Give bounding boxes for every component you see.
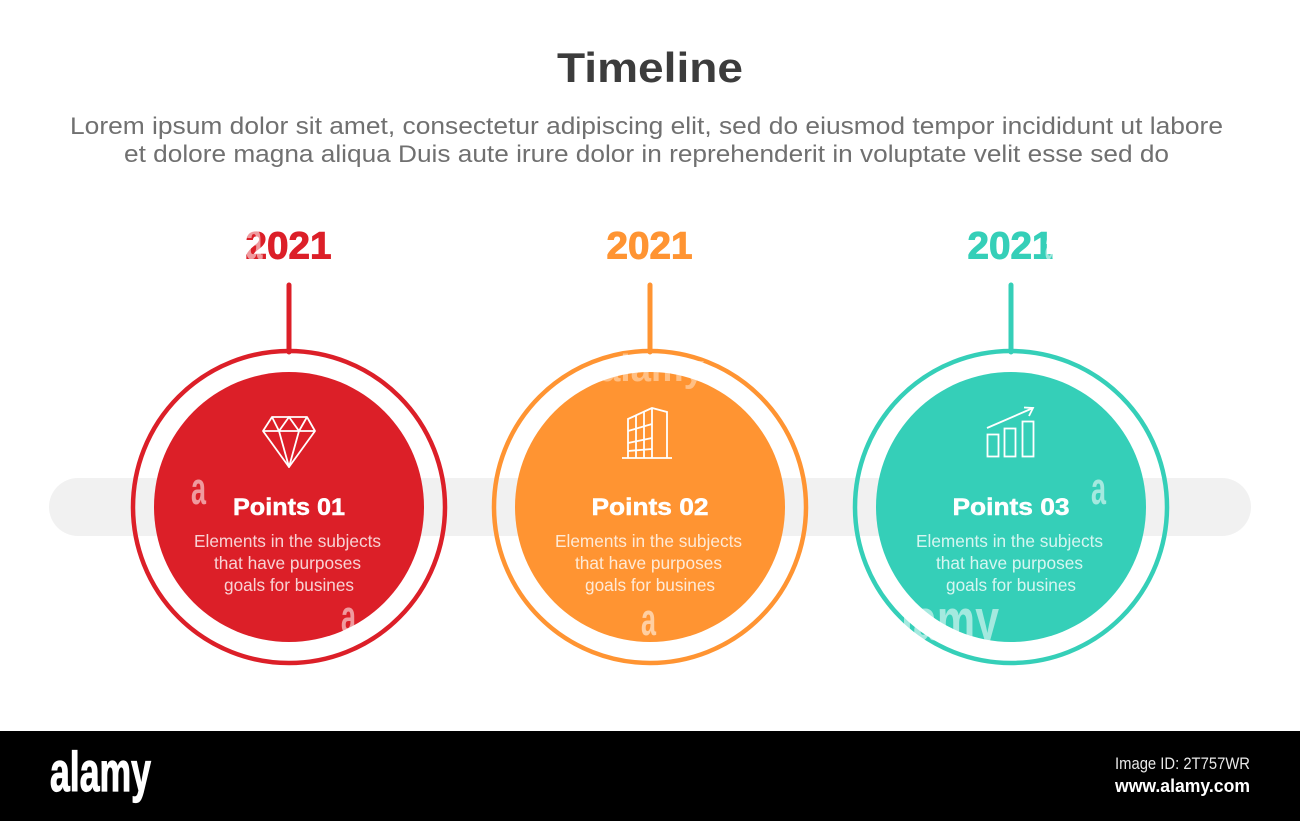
watermark overlays: lamy	[901, 588, 999, 653]
connector 02	[648, 285, 652, 352]
watermark overlays: a	[1091, 463, 1107, 514]
panel: point 01	[133, 226, 445, 663]
heading 02: Points 02	[592, 494, 708, 521]
year 02: 2021	[606, 226, 692, 268]
inner disc 02	[515, 372, 785, 642]
title: Timeline	[557, 44, 743, 91]
icon: growth chart	[987, 408, 1034, 456]
watermark overlays: a	[1045, 224, 1055, 268]
watermark overlays: a	[246, 208, 263, 271]
outer ring 02	[494, 351, 806, 663]
inner disc 03	[876, 372, 1146, 642]
footer website: www.alamy.com	[1114, 776, 1250, 796]
description 03: that have purposes	[936, 553, 1083, 573]
watermark overlays: alamy	[600, 348, 704, 390]
footer bar	[0, 731, 1300, 821]
subtitle text block: et dolore magna aliqua Duis aute irure dolor in reprehenderit in voluptate velit esse sed do	[124, 141, 1169, 168]
watermark overlays: a	[341, 591, 357, 642]
heading 03: Points 03	[952, 494, 1070, 521]
panel: point 02	[494, 226, 806, 663]
description 02	[555, 531, 742, 595]
description 01	[194, 531, 381, 595]
subtitle text block	[70, 113, 1223, 168]
inner disc 01	[154, 372, 424, 642]
footer image id: Image ID: 2T757WR	[1115, 754, 1250, 773]
watermark overlays	[191, 208, 1107, 653]
connector 01	[286, 285, 292, 352]
description 01: that have purposes	[214, 553, 361, 573]
description 03: goals for busines	[946, 575, 1076, 595]
year 01: 2021	[246, 226, 332, 268]
footer logo: alamy	[50, 740, 151, 803]
outer ring 01	[133, 351, 445, 663]
heading 01: Points 01	[233, 494, 345, 521]
description 02: goals for busines	[585, 575, 715, 595]
subtitle text block: Lorem ipsum dolor sit amet, consectetur adipiscing elit, sed do eiusmod tempor incididunt ut labore	[70, 113, 1223, 140]
description 03: Elements in the subjects	[916, 531, 1103, 551]
description 02: Elements in the subjects	[555, 531, 742, 551]
icon: building	[622, 408, 672, 458]
timeline background band	[49, 478, 1251, 536]
icon: diamond	[263, 417, 315, 467]
panel: point 03	[855, 226, 1167, 663]
connector 03	[1008, 285, 1014, 352]
year 03: 2021	[968, 226, 1054, 268]
description 02: that have purposes	[575, 553, 722, 573]
description 01: Elements in the subjects	[194, 531, 381, 551]
watermark overlays: a	[641, 594, 657, 645]
description 03	[916, 531, 1103, 595]
description 01: goals for busines	[224, 575, 354, 595]
outer ring 03	[855, 351, 1167, 663]
watermark overlays: a	[191, 463, 207, 514]
